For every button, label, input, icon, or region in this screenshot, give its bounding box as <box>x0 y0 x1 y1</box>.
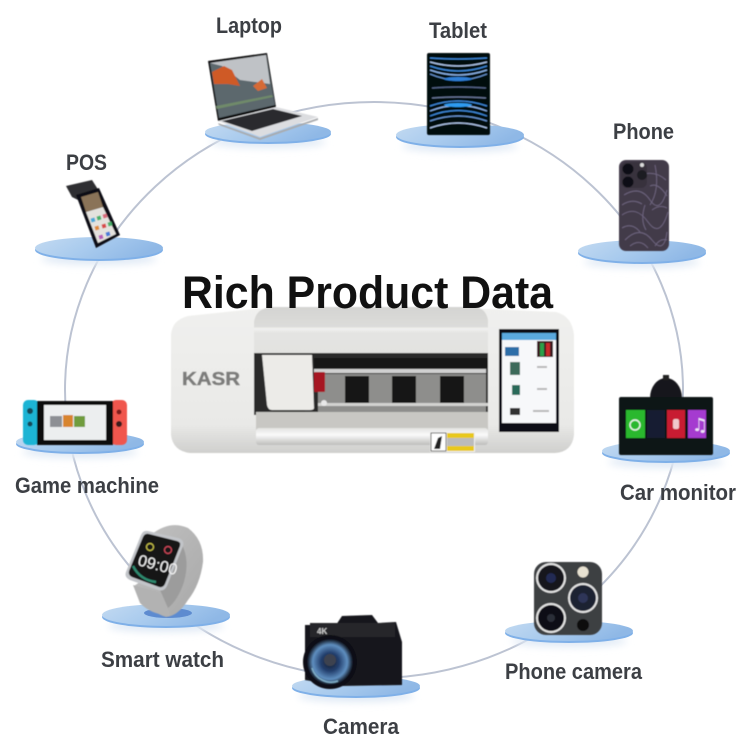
icon: smart watch <box>126 525 203 617</box>
connecting ring <box>65 102 683 678</box>
red blade holder <box>314 372 325 392</box>
label: POS: POS <box>66 150 107 175</box>
icon: game machine <box>23 400 127 445</box>
front roller <box>256 428 488 445</box>
label: Game machine: Game machine <box>15 473 159 498</box>
printer body <box>171 309 574 453</box>
platform: phone camera <box>505 621 633 647</box>
icon: car monitor: ♫ <box>692 415 708 436</box>
brand: KASR: KASR <box>182 368 240 389</box>
platform: car monitor <box>602 441 730 468</box>
label: Laptop: Laptop <box>216 13 282 38</box>
label: Tablet: Tablet <box>429 18 488 43</box>
icon: smart watch: 09:00 <box>136 552 179 579</box>
cutting bed <box>256 412 488 430</box>
icon: car monitor <box>619 375 713 455</box>
platform: game machine <box>16 432 144 458</box>
printer <box>171 307 574 453</box>
label: Smart watch: Smart watch <box>101 647 224 672</box>
platform: phone <box>578 240 706 268</box>
touchscreen <box>499 329 559 432</box>
title: Rich Product Data <box>182 267 554 318</box>
platform: POS <box>35 237 163 265</box>
platform: smart watch <box>102 604 230 632</box>
cutter rollers <box>345 376 464 404</box>
label: Phone camera: Phone camera <box>505 659 643 684</box>
platform: tablet <box>396 124 524 152</box>
icon: phone camera <box>534 562 602 635</box>
icon: camera: 4K <box>317 627 327 636</box>
top cover <box>254 307 488 354</box>
cutting head <box>262 355 314 410</box>
icon: camera <box>303 615 402 689</box>
platform: laptop <box>205 122 331 148</box>
icon: laptop <box>208 53 318 140</box>
platform: camera <box>292 676 420 702</box>
warning label <box>430 432 475 452</box>
paper cavity <box>254 353 488 415</box>
label: Camera: Camera <box>323 714 400 739</box>
label: Phone: Phone <box>613 119 674 144</box>
icon: POS terminal <box>66 180 120 248</box>
icon: phone <box>619 160 669 251</box>
icon: tablet <box>427 53 490 135</box>
label: Car monitor: Car monitor <box>620 480 736 505</box>
